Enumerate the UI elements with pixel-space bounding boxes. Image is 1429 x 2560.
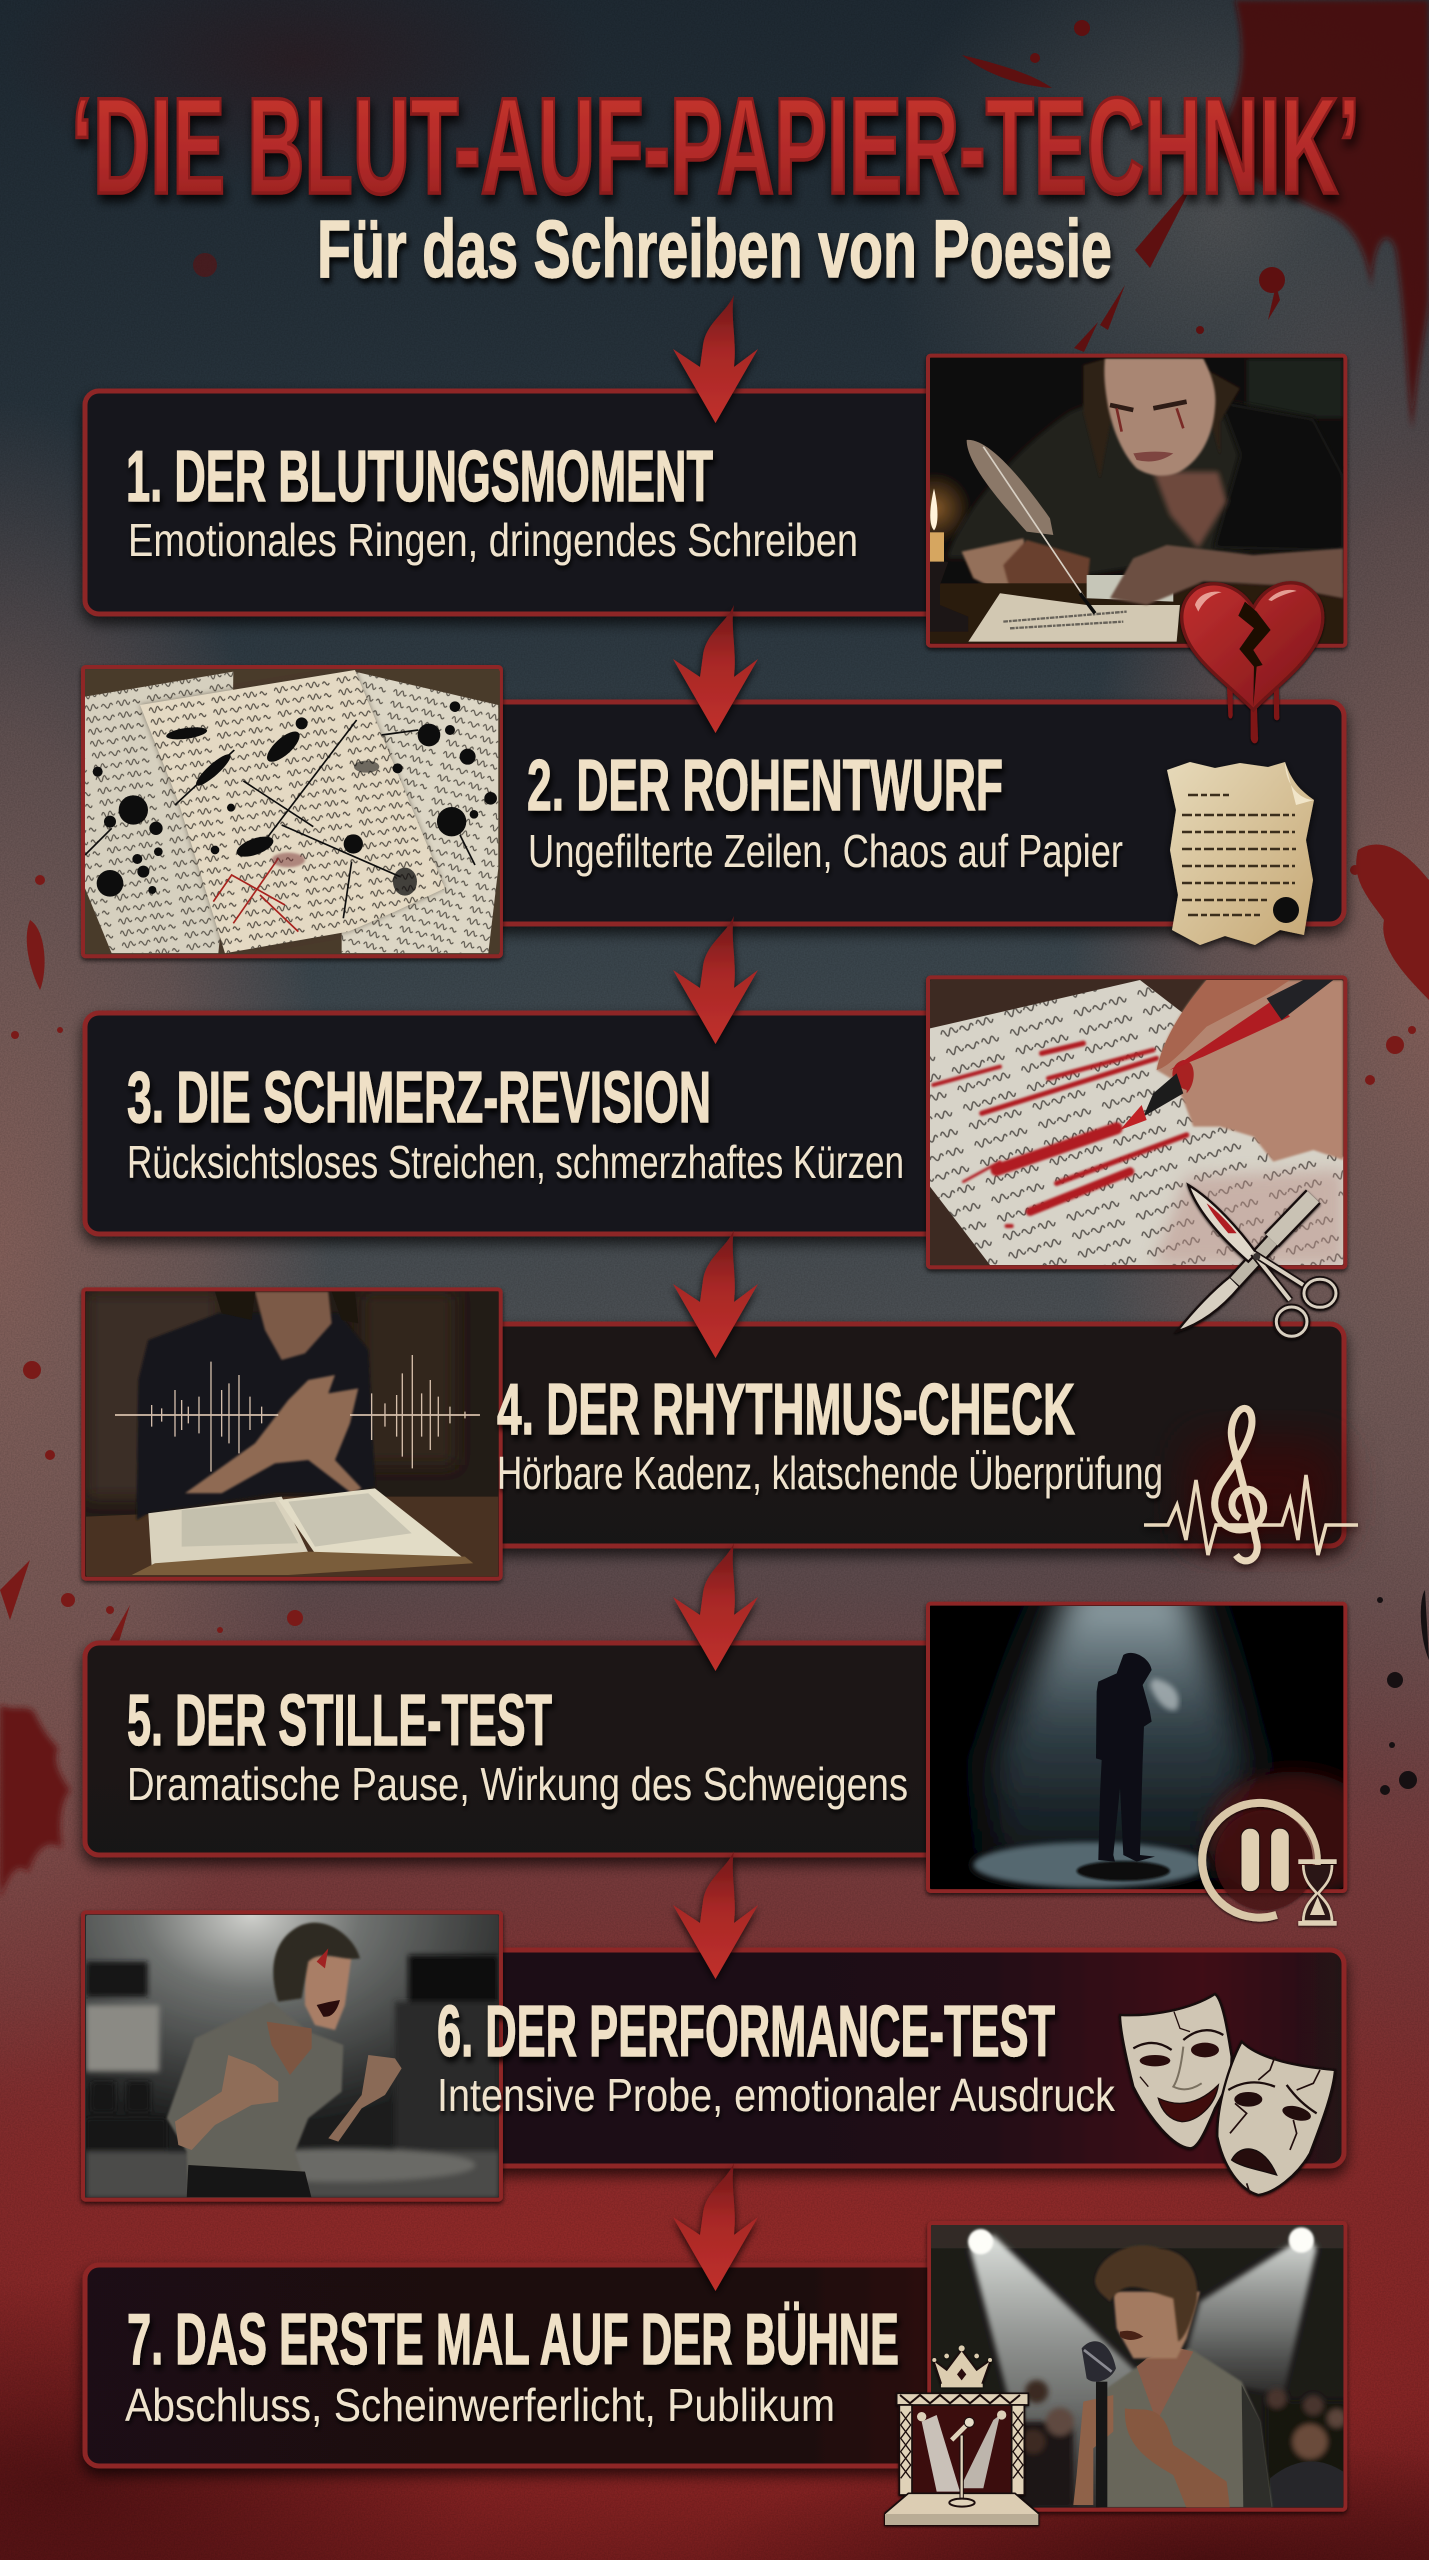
photo: performer on stage	[929, 2223, 1347, 2510]
panel: step 7	[85, 2223, 1347, 2525]
photo: ink-stained manuscript pages	[83, 667, 501, 956]
icon: treble clef with pulse line	[1144, 1408, 1358, 1561]
photo: rehearsing man	[83, 1912, 501, 2200]
icon: stage with crown	[885, 2345, 1038, 2525]
photo: silent figure in spotlight	[923, 1601, 1350, 1898]
icon: torn parchment	[1167, 762, 1314, 945]
text panel	[85, 1643, 1085, 1855]
description: Ungefilterte Zeilen, Chaos auf Papier	[528, 825, 1123, 877]
photo: crying woman writing with quill	[898, 356, 1345, 646]
description: Abschluss, Scheinwerferlicht, Publikum	[125, 2379, 835, 2431]
blood splatter	[0, 0, 1429, 1898]
heading: 4. DER RHYTHMUS-CHECK	[497, 1370, 1075, 1450]
heading: 5. DER STILLE-TEST	[127, 1681, 552, 1761]
panel: step 2	[83, 667, 1344, 956]
text panel	[400, 1950, 1344, 2166]
icon: pause and hourglass	[1202, 1803, 1337, 1923]
flow arrow 7	[673, 2163, 758, 2291]
heading: 3. DIE SCHMERZ-REVISION	[127, 1058, 711, 1138]
icon: theatre masks	[1120, 1994, 1335, 2195]
description: Hörbare Kadenz, klatschende Überprüfung	[497, 1447, 1163, 1499]
description: Intensive Probe, emotionaler Ausdruck	[437, 2069, 1116, 2121]
text panel	[400, 702, 1344, 924]
text panel	[85, 391, 1085, 614]
heading: 2. DER ROHENTWURF	[527, 746, 1003, 826]
photo: clapping rhythm over book	[83, 1289, 501, 1579]
flow arrow 3	[673, 916, 758, 1044]
text panel	[85, 2265, 1085, 2466]
panel: step 1	[85, 356, 1345, 743]
icon: scalpel and scissors	[1177, 1185, 1336, 1336]
panel: step 4	[83, 1289, 1358, 1579]
text panel	[400, 1324, 1344, 1546]
flow arrow 6	[673, 1851, 758, 1979]
description: Emotionales Ringen, dringendes Schreiben	[128, 514, 858, 566]
panel: step 5	[85, 1582, 1380, 1923]
description: Rücksichtsloses Streichen, schmerzhaftes Kürzen	[127, 1136, 904, 1188]
panel: step 3	[85, 977, 1345, 1336]
description: Dramatische Pause, Wirkung des Schweigens	[127, 1758, 908, 1810]
heading: 7. DAS ERSTE MAL AUF DER BÜHNE	[127, 2300, 899, 2380]
flow arrow 4	[673, 1230, 758, 1358]
flow arrow 5	[673, 1543, 758, 1671]
flow arrow 2	[673, 605, 758, 733]
icon: bleeding broken heart	[1182, 583, 1323, 743]
photo: red pen revision	[928, 977, 1345, 1267]
heading: 1. DER BLUTUNGSMOMENT	[126, 437, 713, 517]
flow arrow 1	[673, 295, 758, 423]
text panel	[85, 1013, 1085, 1234]
panel: step 6	[83, 1912, 1344, 2200]
